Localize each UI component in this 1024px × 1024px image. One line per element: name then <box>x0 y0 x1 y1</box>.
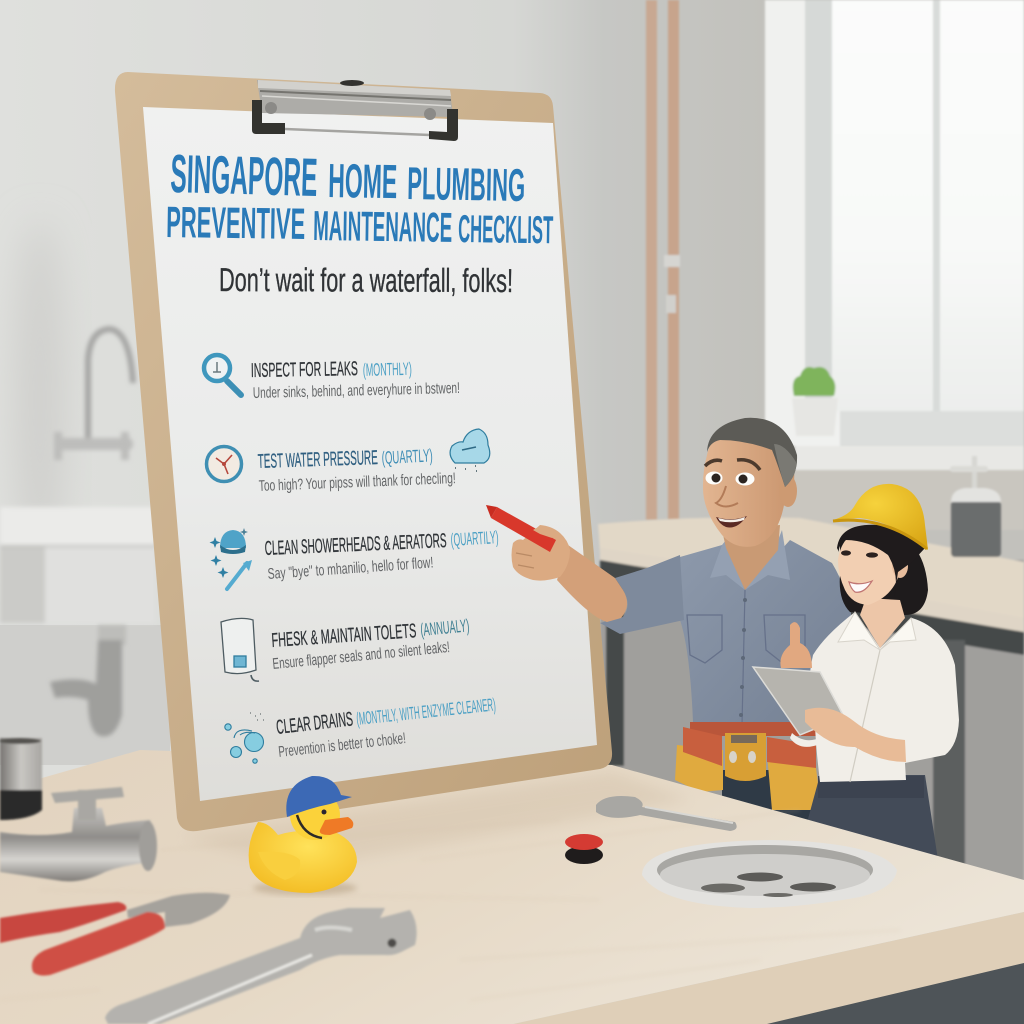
title: SINGAPORE <box>170 144 318 208</box>
board frame <box>115 72 612 831</box>
woman face details <box>841 550 878 592</box>
man: plumber torso, head and tool belt <box>675 418 852 820</box>
checklist item 3: clean showerheads and aerators: Say "bye" to mhanilio, hello for flow! <box>267 554 434 583</box>
metal cup and fitting <box>0 738 42 820</box>
duck head <box>290 790 340 840</box>
clipboard board: CHECKLIST <box>458 208 554 252</box>
man ear <box>779 475 797 507</box>
window with sill and plant <box>765 0 1024 530</box>
checklist item 1: inspect for leaks <box>204 355 460 402</box>
title: HOME <box>328 155 398 209</box>
table top surface <box>0 750 1024 1024</box>
large adjustable wrench <box>105 908 417 1024</box>
marker <box>486 505 556 552</box>
forearm <box>557 545 627 622</box>
icon: bubbles <box>225 713 264 763</box>
table underframe <box>760 955 1024 1024</box>
woman face <box>838 528 900 605</box>
duck body <box>249 822 357 893</box>
title: PLUMBING <box>407 157 526 211</box>
woman back hair <box>840 529 928 615</box>
tabletop props <box>0 738 897 1024</box>
man grey temple hair <box>774 444 796 487</box>
checklist item 3: clean showerheads and aerators <box>210 527 499 589</box>
checklist item 2: test water pressure: TEST WATER PRESSURE <box>257 447 378 473</box>
hand <box>512 525 570 581</box>
rubber duck with blue hard hat <box>249 776 357 895</box>
checklist item 1: inspect for leaks: (MONTHLY) <box>363 359 412 380</box>
checklist item 4: flush and maintain toilets <box>221 615 470 681</box>
woman: apprentice with hard hat and tablet <box>753 484 959 860</box>
checklist item 4: flush and maintain toilets: FHESK & MAINTAIN TOLETS <box>271 620 417 652</box>
wooden work table <box>0 750 1024 1024</box>
clipboard board: (MONTHLY, WITH ENZYME CLEANER) <box>355 694 497 729</box>
icon: showerhead and toothbrush <box>210 528 252 589</box>
woman hair fringe <box>837 525 925 598</box>
woman collar and buttons <box>838 612 916 782</box>
tool belt <box>675 722 820 810</box>
paper sheet <box>143 107 597 801</box>
wood grain <box>0 810 900 1000</box>
woman blouse <box>809 612 959 782</box>
man pointing arm with red marker <box>486 505 684 634</box>
finger creases <box>516 553 534 568</box>
checklist item 4: flush and maintain toilets: (ANNUALY) <box>419 615 470 640</box>
thumb over marker <box>533 527 552 538</box>
icon: potted plant <box>792 367 838 436</box>
icon: pressure gauge <box>206 446 242 482</box>
duck wing <box>258 852 300 880</box>
woman thumbs-up hand <box>780 622 812 668</box>
duck chin strap <box>297 815 322 838</box>
checklist item 5: clear drains: CLEAR DRAINS <box>275 708 354 739</box>
title: PREVENTIVE <box>166 198 306 249</box>
checklist item 2: test water pressure: (QUARTLY) <box>381 445 433 468</box>
tagline: Don’t wait for a waterfall, folks! <box>219 261 513 299</box>
checklist item 5: clear drains <box>225 694 497 763</box>
checklist item 1: inspect for leaks: Under sinks, behind, and everyhure in bstwen! <box>253 380 460 402</box>
wall faucet and sink <box>0 329 155 737</box>
table front face <box>513 912 1024 1024</box>
icon: water heater <box>221 618 259 681</box>
checklist item 2: test water pressure <box>206 429 490 495</box>
metal clip <box>252 80 458 141</box>
checklist item 2: test water pressure: Too high? Your pipss will thank for checling! <box>258 470 456 495</box>
checklist item 1: inspect for leaks: INSPECT FOR LEAKS <box>251 358 358 382</box>
title <box>166 144 554 252</box>
duck shadow <box>253 881 357 895</box>
faucet valve <box>0 787 157 881</box>
red cap <box>565 834 603 864</box>
icon: cloud <box>450 429 490 471</box>
checklist item 5: clear drains: Prevention is better to choke! <box>278 730 407 761</box>
duck hat <box>286 776 352 817</box>
man neck <box>722 525 780 590</box>
icon: magnifying glass <box>204 355 241 395</box>
woman skirt <box>805 775 938 860</box>
right side counter and legs <box>598 456 1024 890</box>
bottle on counter <box>950 456 1001 557</box>
man hair <box>707 418 797 487</box>
man trousers <box>722 770 815 820</box>
checklist item 4: flush and maintain toilets: Ensure flapper seals and no silent leaks! <box>272 639 451 673</box>
man head <box>703 426 794 547</box>
small wrench <box>596 796 737 831</box>
woman hand on tablet <box>805 708 906 762</box>
checklist item 3: clean showerheads and aerators: CLEAN SHOWERHEADS & AERATORS <box>264 530 447 560</box>
man face details <box>705 460 760 528</box>
clipboard board: (QUARTILY) <box>450 527 499 550</box>
tablet <box>753 667 844 735</box>
board shadow on table <box>180 772 690 868</box>
man collar and pockets <box>687 530 805 725</box>
title: MAINTENANCE <box>313 202 453 251</box>
clipboard board <box>115 72 612 831</box>
sleeve <box>600 555 684 634</box>
round drain cover <box>642 840 897 908</box>
copper wall pipes <box>628 0 680 674</box>
red-handled pliers <box>0 893 230 976</box>
man shirt <box>680 540 852 735</box>
woman ear <box>892 554 908 578</box>
woman neck <box>860 598 905 648</box>
woman hard hat <box>833 484 928 550</box>
duck beak <box>320 817 353 835</box>
woman rolled cuff <box>790 733 822 747</box>
